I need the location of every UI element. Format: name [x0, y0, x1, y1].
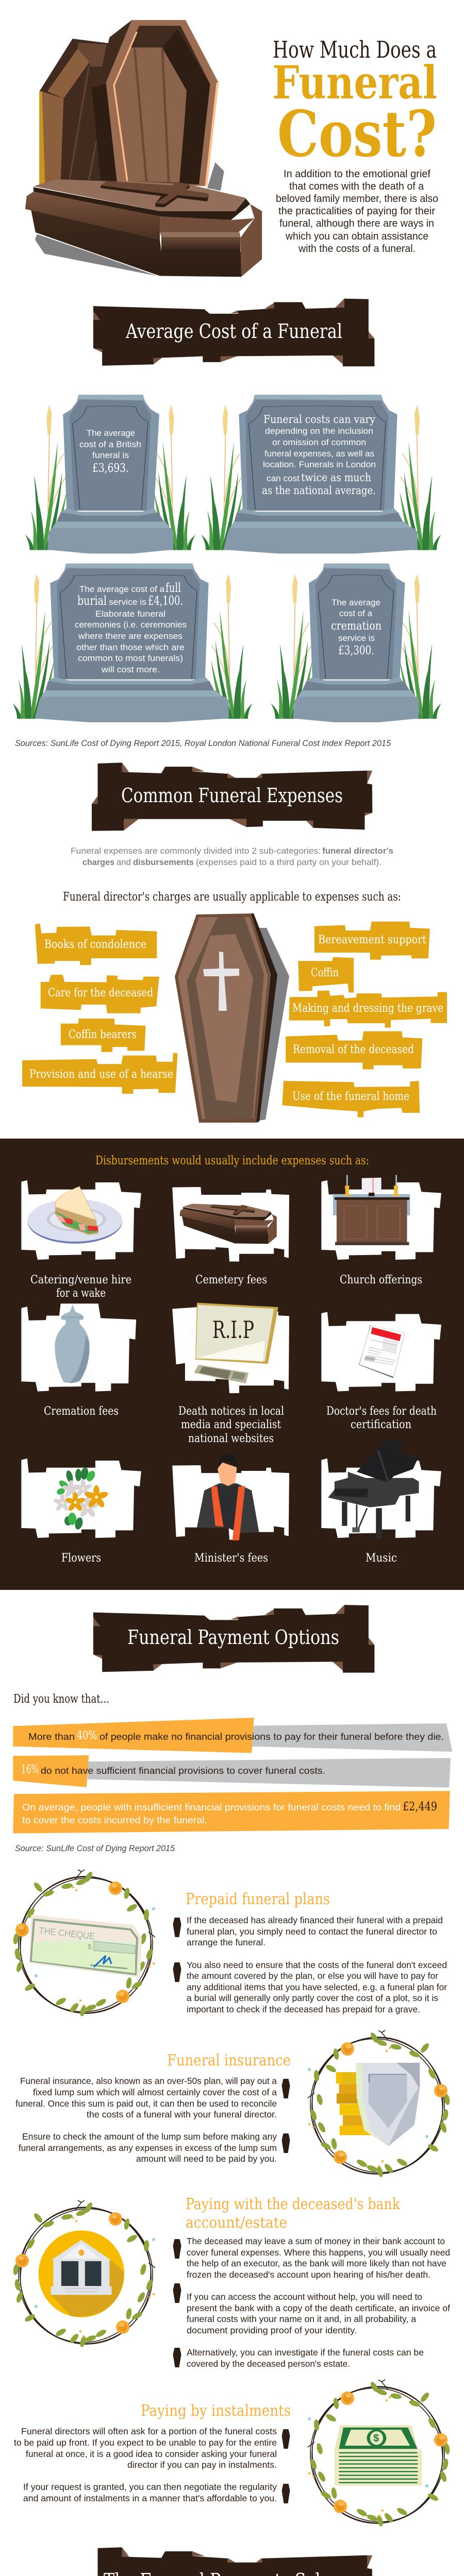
heading banner: payment options: Funeral Payment Options — [127, 1626, 339, 1649]
white tiles — [21, 1180, 441, 1540]
option: deceased's bank account: frozen the deceased's account upon hearing of his/her death. — [187, 2269, 430, 2280]
heading banner: average cost — [93, 299, 374, 366]
option: paying by instalments: to be paid up front. If you expect to be unable to pay for the entire — [14, 2437, 277, 2448]
disbursement labels: Music — [366, 1552, 397, 1565]
tombstone: full burial: service is — [109, 597, 146, 607]
option: deceased's bank account: The deceased may leave a sum of money in their bank account to — [187, 2236, 445, 2246]
option: deceased's bank account: Paying with the deceased's bank — [186, 2195, 401, 2213]
title — [272, 36, 437, 172]
stat bar: 16 percent: 16% — [21, 1763, 39, 1776]
stat bar: average shortfall: £2,449 — [403, 1800, 437, 1814]
tombstone: cremation: cremation — [331, 620, 382, 633]
tombstone: average cost: The average — [87, 428, 135, 438]
option: deceased's bank account: If you can access the account without help, you will need to — [187, 2292, 422, 2302]
tombstone: cost variation: depending on the inclusion — [265, 426, 373, 436]
sources note: Sources: SunLife Cost of Dying Report 2015, Royal London National Funeral Cost Index Report 2015 — [15, 738, 391, 748]
sub-category explanation: funeral director's — [322, 846, 393, 856]
icon: sandwich on plate — [27, 1187, 122, 1244]
disbursement labels: Cemetery fees — [195, 1274, 267, 1286]
illustration: closed coffin with cross — [175, 913, 289, 1123]
tombstone: cremation: service is — [338, 633, 375, 643]
tombstone: full burial: common to most funerals) — [78, 653, 183, 663]
option: paying by instalments: director if you can pay in instalments. — [127, 2460, 277, 2470]
option: paying by instalments — [14, 2402, 291, 2503]
wreath with cheque: THE CHEQUE — [39, 1925, 95, 1941]
heading banner: common expenses: Common Funeral Expenses — [121, 784, 343, 807]
option: funeral insurance: the costs of a funeral with your funeral director. — [87, 2109, 277, 2120]
disbursement labels: Cremation fees — [44, 1405, 119, 1418]
source note: Source: SunLife Cost of Dying Report 2015 — [15, 1843, 175, 1853]
heading banner: common expenses — [92, 762, 372, 831]
tombstone: full burial: burial — [77, 594, 107, 608]
option: deceased's bank account: cover funeral expenses. Where this happens, you will usually need — [187, 2247, 450, 2258]
tombstone: cost variation: or omission of common — [272, 437, 366, 447]
intro text — [276, 168, 438, 255]
did you know heading: Did you know that... — [13, 1692, 109, 1706]
disbursement labels: Church offerings — [340, 1274, 422, 1286]
option: paying by instalments: Paying by instalments — [141, 2402, 291, 2420]
disbursement labels: Doctor's fees for death — [326, 1405, 437, 1418]
option: prepaid funeral plans: funeral plan, you simply need to contact the funeral director to — [187, 1926, 437, 1937]
disbursement labels: Flowers — [61, 1552, 101, 1565]
wreath with bank — [0, 2186, 174, 2365]
option: prepaid funeral plans: the amount covered by the plan, or else you will have to pay for — [187, 1971, 438, 1981]
tombstone: full burial: ceremonies (i.e. ceremonies — [75, 620, 187, 630]
icon: minister — [197, 1454, 259, 1540]
expense tags: Use of the funeral home — [292, 1090, 409, 1103]
disbursement labels: for a wake — [56, 1287, 106, 1300]
wreath with banknotes: $ — [373, 2433, 379, 2444]
option: paying by instalments: Funeral directors will often ask for a portion of the funeral costs — [21, 2426, 277, 2436]
expense tags: Coffin bearers — [69, 1028, 137, 1041]
stat bar: 40 percent — [13, 1718, 452, 1753]
tombstone: full burial: will cost more. — [101, 665, 160, 674]
tombstone: cost variation: can cost — [267, 473, 300, 483]
wreath with shield and coins — [289, 2016, 464, 2195]
option: funeral insurance: fixed lump sum which will almost certainly cover the cost of a — [33, 2087, 277, 2097]
tombstone: average cost: £3,693. — [92, 462, 129, 475]
option: prepaid funeral plans: a burial will generally only partly cover the cost of a plot, so it is — [187, 1993, 438, 2003]
icon: flowers — [53, 1467, 109, 1530]
expense tags: Bereavement support — [318, 934, 426, 946]
option: funeral insurance: Funeral insurance, also known as an over-50s plan, will pay out a — [20, 2076, 277, 2086]
panel: disbursements — [0, 1139, 464, 1590]
icon: church altar — [333, 1175, 410, 1245]
icon: coffin — [179, 1204, 277, 1244]
disbursement labels: Catering/venue hire — [30, 1274, 131, 1286]
tombstone: full burial — [12, 564, 253, 722]
option: paying by instalments: funeral at once, it is a good idea to consider asking your funeral — [26, 2449, 277, 2459]
icon: newspaper R.I.P notice: R.I.P — [212, 1316, 254, 1344]
option: funeral insurance — [15, 2052, 291, 2164]
icon: urn — [55, 1304, 90, 1383]
expense tags: Books of condolence — [44, 938, 146, 951]
tombstone: cost variation — [201, 395, 441, 554]
intro text: with the costs of a funeral. — [298, 243, 416, 255]
tombstone: full burial: other than those which are — [76, 642, 185, 652]
expense tags — [22, 922, 447, 1117]
heading banner: average cost: Average Cost of a Funeral — [125, 320, 342, 343]
intro text: In addition to the emotional grief — [284, 168, 430, 180]
expense tags: Provision and use of a hearse — [29, 1068, 173, 1081]
icon: doctor's certificate — [359, 1325, 405, 1378]
option: deceased's bank account: account/estate — [186, 2214, 287, 2232]
tombstone: cost variation: funeral expenses, as well as — [264, 449, 374, 459]
intro text: funeral, although there are ways in — [279, 218, 434, 229]
option: deceased's bank account — [173, 2195, 450, 2369]
tombstone: full burial: The average cost of a — [79, 584, 165, 594]
tombstone: cremation: The average — [332, 598, 380, 607]
option: prepaid funeral plans: Prepaid funeral plans — [186, 1890, 330, 1908]
sub-category explanation: Funeral expenses are commonly divided into 2 sub-categories: — [71, 846, 321, 856]
stat bar: average shortfall: to cover the costs incurred by the funeral. — [22, 1815, 207, 1825]
stat bar: average shortfall: On average, people with insufficient financial provisions for funeral costs need to find — [22, 1802, 401, 1812]
tombstone: cost variation: Funeral costs can vary — [263, 413, 375, 426]
icon: grand piano — [328, 1439, 419, 1539]
stat bar: average shortfall — [13, 1791, 450, 1834]
option: prepaid funeral plans: If the deceased has already financed their funeral with a prepaid — [187, 1915, 443, 1925]
disbursement labels: national websites — [188, 1432, 274, 1445]
disbursement labels: Death notices in local — [178, 1405, 284, 1418]
tombstone: average cost — [25, 395, 195, 554]
option: deceased's bank account: covered by the deceased person's estate. — [187, 2359, 350, 2369]
intro text: beloved family member, there is also — [276, 193, 438, 205]
disbursement labels — [30, 1274, 437, 1565]
intro text: that comes with the death of a — [289, 181, 424, 192]
option: funeral insurance: Funeral insurance — [167, 2052, 291, 2070]
option: paying by instalments: If your request is granted, you can then negotiate the regularity — [23, 2482, 277, 2492]
wreath with cheque: $ — [88, 1942, 92, 1951]
sub-category explanation: (expenses paid to a third party on your behalf). — [196, 857, 382, 867]
tombstone: full burial: full — [165, 581, 181, 595]
icon: newspaper R.I.P notice — [194, 1303, 278, 1383]
sub-category explanation: charges — [82, 857, 114, 867]
option: deceased's bank account: document providing proof of your identity. — [187, 2325, 357, 2335]
tombstone: cost variation: location. Funerals in London — [263, 460, 376, 469]
expense tags: Care for the deceased — [48, 987, 153, 999]
tombstone: cremation: £3,300. — [338, 644, 374, 657]
option: prepaid funeral plans — [173, 1890, 447, 2014]
tombstone: average cost: cost of a British — [79, 439, 141, 449]
intro text: which you can obtain assistance — [285, 231, 428, 242]
stat bar: 16 percent: do not have sufficient financial provisions to cover funeral costs. — [41, 1766, 325, 1776]
stat bar: 40 percent: 40% — [77, 1729, 97, 1742]
heading banner: payment options — [93, 1605, 374, 1673]
option: deceased's bank account: the help of an executor, as the bank will more likely than not have — [187, 2258, 446, 2268]
stat bar: 16 percent — [13, 1755, 451, 1788]
option: funeral insurance: amount will need to be paid by you. — [136, 2154, 277, 2164]
tombstone: full burial: £4,100. — [148, 594, 183, 608]
sub-category explanation: disbursements — [133, 857, 194, 867]
disbursement labels: certification — [351, 1418, 411, 1431]
option: paying by instalments: and amount of instalments in a manner that's affordable to you. — [23, 2493, 277, 2503]
title: Funeral — [272, 56, 437, 109]
tombstone: average cost: funeral is — [92, 450, 129, 460]
sub-category explanation: and — [117, 857, 131, 867]
option: prepaid funeral plans: You also need to ensure that the costs of the funeral don't exceed — [187, 1960, 447, 1970]
sub-category explanation — [71, 846, 393, 867]
intro text: the practicalities of paying for their — [278, 206, 435, 217]
disbursement labels: Minister's fees — [194, 1552, 268, 1565]
tombstone: full burial: Elaborate funeral — [95, 609, 165, 619]
tombstone: cremation: cost of a — [339, 608, 373, 618]
option: prepaid funeral plans: important to check if the deceased has prepaid for a grave. — [187, 2004, 420, 2014]
wreath with banknotes — [289, 2365, 464, 2545]
tombstone: cost variation: as the national average. — [262, 484, 376, 497]
tombstone: full burial: where there are expenses — [78, 631, 183, 641]
stat bar: 40 percent: of people make no financial provisions to pay for their funeral before they die. — [100, 1732, 444, 1742]
disbursement labels: media and specialist — [181, 1418, 281, 1431]
option: funeral insurance: funeral arrangements, as any expenses in excess of the lump sum — [19, 2143, 277, 2153]
option: funeral insurance: Ensure to check the amount of the lump sum before making any — [22, 2131, 277, 2142]
expense tags: Removal of the deceased — [293, 1043, 414, 1056]
illustration: two coffins — [25, 20, 262, 277]
stat bar: 40 percent: More than — [28, 1732, 75, 1742]
subheading: disbursements: Disbursements would usually include expenses such as: — [95, 1154, 369, 1167]
tombstone: cost variation: twice as much — [301, 471, 371, 484]
option: deceased's bank account: Alternatively, you can investigate if the funeral costs can be — [187, 2347, 424, 2358]
wreath with cheque — [0, 1855, 174, 2035]
tombstone: cremation — [271, 564, 441, 722]
option: deceased's bank account: present the bank with a copy of the death certificate, an invoice of — [187, 2303, 450, 2313]
option: prepaid funeral plans: any additional items that you have selected, e.g. a funeral plan for — [187, 1982, 447, 1992]
option: deceased's bank account: funeral costs with your name on it and, in all probability, a — [187, 2314, 416, 2324]
heading banner: funeral payments scheme — [92, 2547, 372, 2576]
option: funeral insurance: funeral. Once this sum is paid out, it can then be used to reconcile — [15, 2098, 277, 2109]
option: prepaid funeral plans: arrange the funeral. — [187, 1937, 266, 1947]
expense tags: Coffin — [311, 967, 339, 979]
